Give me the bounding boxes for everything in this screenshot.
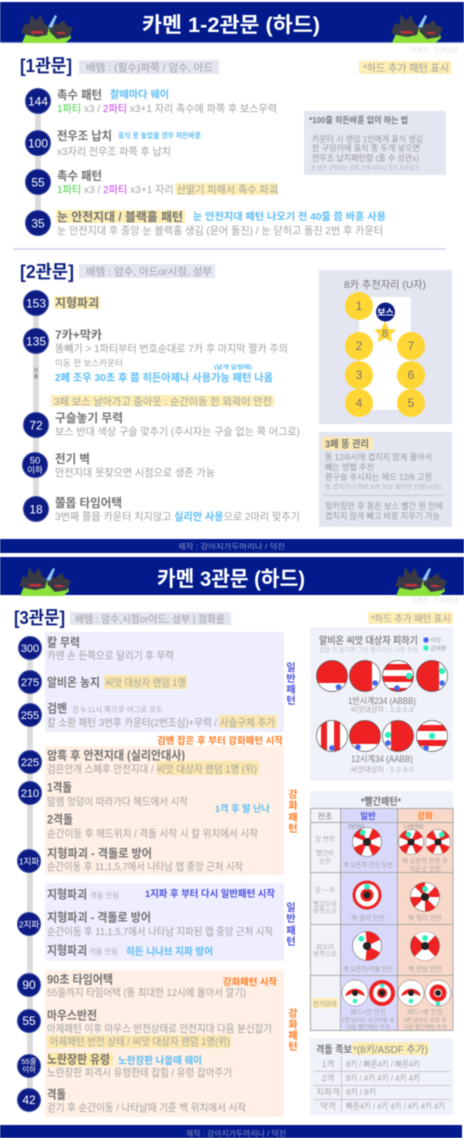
pattern: tentacle 1: 1파티 x3 / 2파티 x3+1 자리 촉수에 파쪽 후 보스무력 xyxy=(57,103,277,115)
panel: phase 3 poop management xyxy=(319,432,452,527)
panel: clash rhythm: *(8키/ASDF 추가) xyxy=(353,1044,428,1056)
repeat count labels: 2번연타 xyxy=(348,824,365,830)
pattern: mouse reversal xyxy=(47,1008,272,1048)
pattern: 7 plus last: 3페 보스 날아가고 줌아웃 : 순간이동 한 외곽이 안전 xyxy=(54,396,272,408)
cell: electric aura xyxy=(312,998,338,1008)
legend xyxy=(423,637,447,652)
pattern: yellow floor ghost: 노란장판 피격시 유령한테 잡힘 / 유령 잡아주기 xyxy=(47,1066,232,1079)
heading: gate 3: [3관문] xyxy=(14,608,65,628)
pattern: second clash: 2격돌 xyxy=(47,812,73,826)
hp marker 255 xyxy=(18,704,42,726)
diagram: normal red 2 rings xyxy=(352,880,382,910)
rows xyxy=(316,1059,445,1111)
hp marker 18: 18 xyxy=(29,502,43,516)
hp marker 72 xyxy=(24,412,48,438)
footer 1: 제작 : 강아지가두마리나 / 덕진 xyxy=(178,541,285,551)
diagram: circle 4 row 2 xyxy=(416,720,448,752)
pattern: terrain destruction with clash: 지형파괴 - 격돌로 방어 xyxy=(47,846,152,860)
pattern: clash: 격돌 xyxy=(47,1088,66,1102)
heading: gate 3 xyxy=(14,608,231,628)
hp marker 55: 55 xyxy=(22,1014,36,1028)
hp marker 135 xyxy=(24,328,48,354)
rows: 막격 xyxy=(320,1101,336,1111)
diagram: normal red 1 xyxy=(352,828,382,856)
pattern: snow safe zone: 눈 안전지대 후 중앙 눈 블랙홀 생김 (문어 돌진) / 눈 닫히고 돌진 2번 후 카운터 xyxy=(57,224,383,237)
diagram: normal electric 1 xyxy=(342,980,368,1006)
marker: 55 seconds or less xyxy=(18,1054,40,1078)
panel: 8 party spots: 4 xyxy=(356,396,363,410)
hp marker 255: 255 xyxy=(21,710,39,722)
panel: 8 party spots: 5 xyxy=(408,396,415,410)
diagram: circle 2 row 1 xyxy=(349,660,380,692)
diagram captions: 백 오른쪽 안전 두번 xyxy=(343,860,393,869)
diagram: enhanced red 3 xyxy=(410,932,440,960)
pattern: 90 time attack: 55줄까지 타임어택 (똥 최대한 12시에 몰아서 깔기) xyxy=(47,986,246,999)
hp marker 42: 42 xyxy=(22,1093,36,1107)
hp marker 153: 153 xyxy=(26,296,46,310)
pattern: yellow floor ghost: 노란장판 유령 xyxy=(47,1052,110,1066)
diagram: circle 2 row 2 xyxy=(349,720,381,752)
pattern: tentacle 1 xyxy=(57,88,277,115)
hp marker 55 xyxy=(18,1010,40,1032)
left cells: 밖쪽으로 xyxy=(313,906,337,915)
diagram: circle 4 row 1 xyxy=(416,660,448,692)
icon: boss: 보스 xyxy=(377,308,394,318)
pattern: electric wall: 전기 벽 xyxy=(55,451,90,466)
panel: phase 3 poop management: 똥 겹치거나 멤버 8개 이상 쌓이면 전멸(시정) xyxy=(325,483,441,491)
timeline: gate 2 xyxy=(22,290,48,522)
pattern: minion time attack xyxy=(55,496,300,523)
hp marker 210 xyxy=(18,782,42,804)
pattern: 7 plus last: (날개 달릴때) xyxy=(214,363,252,371)
hp marker 90 xyxy=(18,974,40,996)
heading: gate 1 xyxy=(20,56,219,76)
side label: enhanced pattern 2: 패 xyxy=(288,1029,298,1042)
pattern: 7 plus last: 이동 전 보스카운터 xyxy=(55,358,123,368)
rows: 빠른4키 / 4키 4키 / 4키 4키 4키 xyxy=(346,1101,445,1111)
diagram captions: 헤드>밖 안전 xyxy=(407,1007,443,1016)
pattern: yellow floor ghost: 노란장판 나올때 웨이 xyxy=(118,1054,202,1067)
tag: hard pattern note: *하드 추가 패턴 표시 xyxy=(371,613,451,625)
note panel: 100 line without hidden: 전우조 납치패턴함 (줄 수 상관x) xyxy=(312,153,419,163)
move label: 동 xyxy=(34,374,39,380)
panel: red pattern table: 일반 xyxy=(360,811,376,821)
move label xyxy=(34,367,39,380)
legend: 금대원 xyxy=(430,644,447,652)
diagram captions: 헤드>안 안전 xyxy=(350,1007,386,1016)
note panel: 100 line without hidden: 똥 넣은 구덩이는 암흑 건계 터지니 정지 토하잡기 xyxy=(311,164,419,172)
caption row 1: 씨앗대상자 : 1-2-1-2 xyxy=(350,704,414,714)
diagram captions: 백 오른쪽 안전 후 xyxy=(402,856,448,865)
panel: clash rhythm xyxy=(310,1038,453,1115)
icon: star spot 8: 8 xyxy=(382,328,388,340)
diagram captions: 다음 빨간패턴 주의 xyxy=(403,1023,447,1031)
heading: gate 1: [1관문] xyxy=(20,56,72,76)
diagram: enhanced electric 1 xyxy=(398,980,424,1006)
pattern: terrain destruction no clash: 1지파 후 부터 다시 일반패턴 시작 xyxy=(145,888,275,900)
panel: 8 party spots: 1 xyxy=(356,299,363,313)
hp marker 275: 275 xyxy=(21,677,39,689)
note panel: 100 line without hidden: 한 구덩이에 표식 똥 두개 넣으면 xyxy=(312,143,420,153)
marker: 55 seconds or less: 이하 xyxy=(22,1064,36,1074)
pattern: black sword xyxy=(47,702,277,729)
pattern: sword stagger xyxy=(47,636,174,662)
pattern: terrain destruction clash defense: 순간이동 후 11,1,5,7에서 나타남 지파된 맵 중앙 근처 시작 xyxy=(47,926,273,938)
pattern: black sword: 칼 소환 패턴 3번후 카운터(2번조심)+무력 / 사슬구체 추가 xyxy=(47,716,275,729)
pattern: 7 plus last: 똥빼기 > 1파티부터 번호순대로 7카 후 마지막 짤카 주의 xyxy=(55,342,288,355)
hp marker 35: 35 xyxy=(31,216,45,230)
panel: red pattern table: 전조 xyxy=(318,811,332,821)
panel: albion seed xyxy=(310,627,453,781)
panel: red pattern table xyxy=(310,791,454,1031)
hp marker 55 xyxy=(26,170,50,194)
pattern: 7 plus last: 2페 조우 30초 후 쯤 히든아제나 사용가능 패턴 나옴 xyxy=(55,371,273,384)
pattern: terrain destruction clash defense xyxy=(47,910,273,938)
credit small: 카멘큰 - 또라끔님 xyxy=(411,595,458,604)
pattern: terrain destruction with clash xyxy=(47,846,243,873)
hp marker 50 under xyxy=(22,452,48,478)
pattern: black sword: 검 9-11시 쪽으로 어그로 유도 xyxy=(72,704,163,714)
panel: phase 3 poop management: 똥 12/6시에 겹치지 않게 몰아서 xyxy=(325,452,432,462)
rows: 8키 / 8키 xyxy=(346,1087,376,1097)
left cells: 승천 xyxy=(319,856,331,865)
diagram: circle 1 row 1 xyxy=(316,660,348,692)
pattern: second clash: 순간이동 후 헤드위치 / 격돌 시작 시 칼 위치에서 시작 xyxy=(47,827,258,840)
diagram: normal red 3 xyxy=(352,931,382,961)
pattern: albion field: 씨앗 대상자 랜덤 1명 xyxy=(105,677,186,689)
pattern: mouse reversal: 마우스반전 xyxy=(47,1008,97,1022)
callout: enhanced pattern begins: 검멘 잡은 후 부터 강화패턴 시작 xyxy=(157,735,283,747)
pattern: 7 plus last xyxy=(51,327,288,408)
side label: normal pattern 1: 반 xyxy=(286,672,296,685)
note panel: 100 line without hidden: 카운터 시 랜덤 1인에게 표식 생김 xyxy=(312,134,423,144)
pattern: abduction: 표식 못 놓았을 경우 히든바훈 xyxy=(118,130,201,140)
side label: normal pattern 2: 일 xyxy=(286,901,296,914)
hp marker 18 xyxy=(24,496,48,522)
footer 2 xyxy=(0,1125,462,1138)
marker: first wave: 1지파 xyxy=(19,856,39,866)
diagram: enhanced electric 2 xyxy=(425,980,451,1006)
diagram: enhanced red 1b xyxy=(426,830,450,854)
hp marker 50 under: 이하 xyxy=(27,465,43,475)
side label: enhanced pattern 2: 화 xyxy=(288,1018,298,1031)
pattern: terrain destruction clash defense: 지형파괴 - 격돌로 방어 xyxy=(47,910,151,924)
diagram captions: 3연 넘어도 바로 후 xyxy=(403,1016,447,1024)
panel: 8 party spots: 3 xyxy=(356,368,363,382)
hp marker 225 xyxy=(18,750,42,774)
pattern: abduction xyxy=(57,129,201,158)
side label: normal pattern 1: 일 xyxy=(286,661,296,674)
marker: second wave: 2지파 xyxy=(19,920,39,930)
pattern: electric wall xyxy=(55,451,215,479)
panel: phase 3 poop management: 겹치지 않게 빼고 바로 지우기 가능 xyxy=(325,511,440,521)
panel: red pattern table: 강화 xyxy=(417,811,433,821)
hp marker 55: 55 xyxy=(31,176,45,190)
side label: enhanced pattern 2 xyxy=(288,1008,298,1053)
side label: enhanced pattern 1 xyxy=(288,789,298,835)
panel: phase 3 poop management: 환구슬 주시자는 헤드 12/6 고정 xyxy=(325,472,432,482)
diagram captions: 백 오른쪽/막볼 안전 xyxy=(343,964,393,973)
pattern: second clash xyxy=(47,812,258,840)
left cells: 회오리 xyxy=(316,942,334,951)
header: Kamen gate 3 xyxy=(0,557,464,596)
icon: mascot right xyxy=(391,14,443,43)
marker: second wave xyxy=(18,912,40,936)
pattern: tentacle 2: 촉수 패턴 xyxy=(57,169,102,183)
pattern: terrain destruction hidden: 히든 니나브 지파 방어 xyxy=(126,945,213,958)
diagram: normal electric 2 xyxy=(369,980,395,1006)
caption row 1 xyxy=(348,695,416,714)
move label: 이 xyxy=(34,367,38,374)
pattern: snow safe zone xyxy=(56,209,386,237)
footer 2: 제작 : 강아지가두마리나 / 덕진 xyxy=(186,1128,286,1138)
rows: 1격 xyxy=(322,1059,334,1069)
pattern: minion time attack: 쫄몹 타임어택 xyxy=(55,496,122,510)
hp marker 144: 144 xyxy=(28,94,48,108)
hp marker 210: 210 xyxy=(21,788,39,800)
pattern: black sword: 검멘 xyxy=(47,702,67,716)
hp marker 35 xyxy=(26,210,50,236)
panel: 8 party spots xyxy=(319,270,452,424)
heading: gate 2 xyxy=(20,262,215,282)
rows: 8키 / 4키 4키 / 4키 4키 xyxy=(346,1073,420,1083)
title: 카멘 3관문 (하드) xyxy=(157,568,305,591)
pattern: terrain destruction hidden: 지형파괴 xyxy=(47,942,87,958)
diagram captions: 다음 빨간패턴 주의 xyxy=(346,1023,390,1031)
pattern: mouse reversal: 아제패턴 반전 상태 / 씨앗 대상자 랜덤 1명(위) xyxy=(50,1035,230,1048)
diagram: enhanced red 2 xyxy=(407,879,443,915)
side label: normal pattern 2 xyxy=(286,901,296,948)
pattern: tentacle 1: 찰때마다 웨이 xyxy=(110,88,169,101)
pattern: first clash: 1격 후 말 난나 xyxy=(215,803,270,815)
hp marker 50 under: 50 xyxy=(30,456,40,466)
diagram captions: 백 전원 안전 xyxy=(408,964,442,973)
panel: clash rhythm: 격돌 족보 xyxy=(316,1044,352,1056)
hp marker 42 xyxy=(18,1088,40,1112)
pattern: sword stagger: 카멘 손 든쪽으로 달리기 후 무력 xyxy=(47,650,174,662)
side label: enhanced pattern 1: 화 xyxy=(288,799,298,812)
pattern: orb xyxy=(55,410,300,438)
left cells: 밖쪽으로 xyxy=(313,949,337,958)
side label: normal pattern 1 xyxy=(286,661,296,707)
pattern: 90 time attack xyxy=(47,972,278,999)
pattern: terrain destruction no clash xyxy=(47,886,275,902)
pattern: abduction: x3자리 전우조 파쪽 후 납치 xyxy=(57,146,171,158)
badge: battle items: 배템 : (필수)파쪽 / 암수, 아드 xyxy=(86,62,213,74)
side label: normal pattern 1: 패 xyxy=(286,683,296,696)
pattern: clash: 걷기 후 순간이동 / 나타날때 기준 백 위치에서 시작 xyxy=(47,1101,246,1114)
pattern: darkness safe zone: 검은안개 스페후 안전지대 / 씨앗 대상자 랜덤 1명 (위) xyxy=(47,762,257,776)
hp marker 300 xyxy=(18,636,42,660)
pattern: orb: 보스 반대 색상 구슬 맞추기 (주시자는 구슬 없는 쪽 어그로) xyxy=(55,425,300,438)
panel: albion seed: 겹칠 것 같다면 그냥 멀리가서 시정 추천 xyxy=(319,646,418,654)
pattern: yellow floor ghost xyxy=(47,1052,232,1079)
left cells: 칼 변력 xyxy=(315,835,335,843)
diagram captions: 백 멀리 안전 xyxy=(408,913,442,922)
legend: 씨앗 xyxy=(430,637,442,644)
pattern: tentacle 2: 1파티 x3 / 2파티 x3+1 자리 산딸기 피해서 촉수 파괴 xyxy=(57,183,278,196)
panel: phase 3 poop management: 빼는 방법 추천 xyxy=(325,462,374,472)
panel: 8 party spots: 6 xyxy=(408,368,415,382)
footer 1 xyxy=(0,539,464,553)
diagram: circle 1 row 2 xyxy=(316,720,348,752)
side label: enhanced pattern 1: 강 xyxy=(288,789,298,801)
side label: normal pattern 2: 반 xyxy=(286,912,296,925)
pattern: snow safe zone: 눈 안전지대 패턴 나오기 전 40줄 쯤 바훈 사용 xyxy=(193,210,386,223)
diagram captions: 백 멀리 안전 xyxy=(351,913,385,922)
pattern: terrain destruction hidden xyxy=(47,942,213,958)
diagram captions: 1연 넘어도 순간이동 후 xyxy=(341,1016,395,1024)
pattern: terrain destruction with clash: 순간이동 후 11,1,5,7에서 나타남 맵 중앙 근처 시작 xyxy=(47,861,243,873)
left cells: 빨간비 xyxy=(316,848,334,857)
panel: phase 3 poop management: 3페 똥 관리 xyxy=(325,438,369,450)
pattern: albion field: 알비온 농지 xyxy=(47,676,100,690)
side label: enhanced pattern 2: 강 xyxy=(288,1008,298,1020)
pattern: electric wall: 안전지대 못찾으면 시점으로 생존 가능 xyxy=(55,467,215,479)
side label: enhanced pattern 2: 턴 xyxy=(288,1041,298,1053)
pattern: terrain destruction: 지형파괴 xyxy=(55,295,99,310)
hp marker 100 xyxy=(26,130,50,156)
pattern: tentacle 2 xyxy=(57,169,278,196)
badge: battle items: 배템 : 암수, 아드or시정, 성부 xyxy=(86,266,212,278)
pattern: terrain destruction no clash: 지형파괴 xyxy=(47,886,87,902)
note panel: 100 line without hidden xyxy=(304,111,446,175)
repeat count labels: 1.5번연타 xyxy=(403,824,424,830)
hp marker 225: 225 xyxy=(21,757,39,769)
pattern: terrain destruction hidden: 격돌 안됨 xyxy=(89,946,118,956)
side label: normal pattern 1: 턴 xyxy=(286,695,296,707)
pattern: darkness safe zone xyxy=(47,748,259,776)
credit small: 카멘큰 - 또라끔님 xyxy=(411,45,458,54)
pattern: 7 plus last: 7카+막카 xyxy=(55,327,102,342)
hp marker 72: 72 xyxy=(29,418,43,432)
pattern: terrain destruction no clash: 격돌 안됨 xyxy=(90,890,119,900)
pattern: minion time attack: 3번째 쫄몹 카운터 치지않고 실리안 사용으로 2마리 맞추기 xyxy=(55,510,300,523)
pattern: clash xyxy=(47,1088,246,1114)
title: 카멘 1-2관문 (하드) xyxy=(142,14,320,37)
timeline: gate 1 xyxy=(26,88,50,236)
icon: mascot left xyxy=(19,567,71,596)
pattern: 90 time attack: 90초 타임어택 xyxy=(47,972,113,986)
icon: boss xyxy=(376,302,395,322)
pattern: orb: 구슬놓기 무력 xyxy=(55,410,123,425)
rows: 2격 xyxy=(322,1073,334,1083)
pattern: tentacle 1: 촉수 패턴 xyxy=(57,88,102,102)
side label: enhanced pattern 1: 패 xyxy=(288,811,298,824)
heading: gate 2: [2관문] xyxy=(20,262,74,282)
panel: albion seed: 알비온 씨앗 대상자 피하기 xyxy=(319,634,418,647)
badge: battle items: 배템 : 암수,시정or아드, 성부 | 정화룬 xyxy=(75,614,225,626)
left cells: 빨갑모라 xyxy=(313,899,337,908)
rows: 지파격 xyxy=(316,1087,340,1097)
timeline: gate 3 xyxy=(18,636,42,1112)
side label: normal pattern 2: 턴 xyxy=(286,936,296,948)
pattern: abduction: 전우조 납치 xyxy=(57,129,112,143)
panel: 8 party spots: 2 xyxy=(356,339,363,353)
pattern: first clash: 말렘 엉덩이 따라가다 헤드에서 시작 xyxy=(47,795,188,808)
side label: enhanced pattern 1: 턴 xyxy=(288,823,298,835)
repeat count labels xyxy=(348,824,424,830)
note panel: 100 line without hidden: *100줄 히든바훈 없이 하는 법 xyxy=(309,115,408,125)
panel bands xyxy=(45,632,284,1117)
icon: mascot left xyxy=(21,14,73,43)
hp marker 300: 300 xyxy=(21,643,39,655)
pattern: snow safe zone: 눈 안전지대 / 블랙홀 패턴 xyxy=(57,209,183,224)
caption row 2: 12시계34 (AABB) xyxy=(351,753,413,764)
pattern: albion field xyxy=(47,675,187,690)
panel: phase 3 poop management: 헐커짐만 후 똥은 보스 빨간 원 안에 xyxy=(325,501,443,511)
hp marker 100: 100 xyxy=(28,136,48,150)
hp marker 153 xyxy=(24,290,48,316)
cell: electric aura: 전기모라 xyxy=(313,999,337,1008)
diagram: enhanced red 1a xyxy=(398,830,424,854)
marker: 55 seconds or less: 55줄 xyxy=(21,1057,37,1066)
panel: 8 party spots: 8카 추천자리 (U자) xyxy=(344,279,426,291)
pattern: mouse reversal: 아제패턴 이후 마우스 반전상태로 안전지대 다음 분신잡기 xyxy=(47,1023,272,1035)
hp marker 144 xyxy=(26,88,50,114)
pattern: first clash xyxy=(47,780,270,815)
icon: mascot right xyxy=(395,567,447,596)
diagram: circle 3 row 2 xyxy=(382,720,414,752)
rows: 8키 / 빠른4키 / 빠른4키 xyxy=(346,1059,420,1069)
left cells: 칼 —자 xyxy=(315,885,335,894)
panel: 8 party spots: 7 xyxy=(408,339,415,353)
hp marker 135: 135 xyxy=(26,334,46,348)
hp marker 275 xyxy=(18,670,42,694)
hp marker 90: 90 xyxy=(22,978,36,992)
diagram captions xyxy=(341,856,448,1031)
caption row 2 xyxy=(350,753,414,774)
pattern: first clash: 1격돌 xyxy=(47,780,72,794)
panel: red pattern table: *빨간패턴* xyxy=(361,795,401,808)
pattern: sword stagger: 칼 무력 xyxy=(47,636,80,650)
pattern: 90 time attack: 강화패턴 시작 xyxy=(223,976,278,987)
left cells xyxy=(313,835,337,958)
marker: first wave xyxy=(18,850,40,872)
header: Kamen gates 1-2 xyxy=(0,2,464,43)
tag: hard pattern note: *하드 추가 패턴 표시 xyxy=(363,62,449,74)
pattern: darkness safe zone: 암흑 후 안전지대 (실리안대사) xyxy=(47,748,185,762)
side label: normal pattern 2: 패 xyxy=(286,924,296,937)
caption row 1: 1반시계234 (ABBB) xyxy=(348,695,416,706)
icon: star spot 8 xyxy=(374,321,396,342)
caption row 2: 씨앗대상자 : 1-2-3-2 xyxy=(350,764,414,774)
diagram captions: 적은곳 안전 xyxy=(409,864,441,873)
diagram: circle 3 row 1 xyxy=(382,660,414,692)
